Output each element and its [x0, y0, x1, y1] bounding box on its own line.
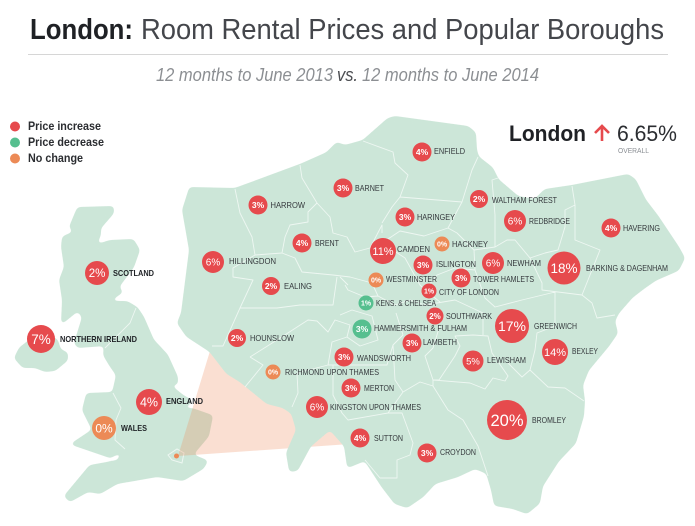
- Barnet: 3%: [337, 183, 350, 193]
- Haringey: [396, 208, 455, 226]
- callout: London overall: OVERALL: [618, 146, 649, 155]
- Ealing: EALING: [284, 282, 312, 291]
- Hackney: 0%: [437, 242, 448, 248]
- Richmond upon Thames: [266, 364, 379, 380]
- Hillingdon: [202, 251, 276, 273]
- Barking and Dagenham: BARKING & DAGENHAM: [586, 264, 668, 273]
- Richmond upon Thames: RICHMOND UPON THAMES: [285, 368, 379, 377]
- Enfield: [412, 142, 465, 162]
- legend: No change: [28, 151, 83, 165]
- Kingston upon Thames: 6%: [310, 402, 324, 414]
- Redbridge: [504, 210, 570, 232]
- callout: London overall: 6.65%: [617, 121, 677, 146]
- London map: [178, 117, 684, 513]
- UK bubbles: [27, 261, 203, 440]
- Ealing: [262, 277, 312, 295]
- Greenwich: 17%: [498, 318, 526, 334]
- Northern Ireland: [27, 325, 137, 353]
- Brent: BRENT: [315, 239, 339, 248]
- Haringey: 3%: [399, 212, 412, 222]
- Bromley: [487, 400, 566, 440]
- UK map: [15, 207, 212, 501]
- Croydon: CROYDON: [440, 448, 476, 457]
- Newham: 6%: [486, 258, 500, 270]
- Redbridge: REDBRIDGE: [529, 217, 570, 226]
- Westminster: 0%: [371, 278, 382, 284]
- Wandsworth: 3%: [338, 352, 351, 362]
- Hillingdon: 6%: [206, 258, 220, 268]
- Camden: CAMDEN: [397, 245, 430, 254]
- Tower Hamlets: 3%: [455, 273, 468, 283]
- Sutton: 4%: [354, 433, 367, 443]
- Kingston upon Thames: [306, 396, 421, 418]
- Kingston upon Thames: KINGSTON UPON THAMES: [330, 403, 421, 412]
- Hillingdon: HILLINGDON: [229, 257, 276, 266]
- Islington: [414, 256, 476, 274]
- Scotland: 2%: [89, 268, 105, 280]
- Northern Ireland: NORTHERN IRELAND: [60, 335, 137, 344]
- Scotland: [85, 261, 154, 285]
- Richmond upon Thames: 0%: [268, 370, 279, 376]
- Kensington and Chelsea: [358, 296, 436, 310]
- Brent: [292, 234, 339, 252]
- Merton: MERTON: [364, 384, 394, 393]
- Lewisham: [462, 350, 526, 372]
- icon: London location marker: [174, 454, 179, 458]
- City of London: 1%: [424, 288, 435, 296]
- Southwark: SOUTHWARK: [446, 312, 492, 321]
- Wandsworth: [334, 348, 411, 366]
- legend: Price increase: [28, 119, 101, 133]
- England: ENGLAND: [166, 397, 203, 406]
- icon: up arrow: [595, 126, 609, 141]
- Camden: 11%: [372, 246, 394, 258]
- Southwark: 2%: [429, 312, 441, 321]
- Sutton: SUTTON: [374, 434, 403, 443]
- Lewisham: LEWISHAM: [487, 356, 526, 365]
- Barnet: BARNET: [355, 184, 384, 193]
- subtitle: vs.: [337, 65, 358, 85]
- Hackney: HACKNEY: [452, 240, 488, 249]
- Merton: [342, 378, 394, 398]
- Barnet: [334, 178, 384, 198]
- Redbridge: 6%: [508, 216, 522, 228]
- Bexley: BEXLEY: [572, 347, 598, 356]
- Havering: [602, 218, 660, 238]
- Havering: HAVERING: [623, 224, 660, 233]
- Barking and Dagenham: 18%: [550, 261, 578, 276]
- Lambeth: [402, 334, 457, 352]
- Islington: 3%: [417, 260, 430, 270]
- Bromley: BROMLEY: [532, 416, 566, 425]
- City of London: [422, 284, 499, 298]
- England: [136, 389, 203, 415]
- Bromley: 20%: [490, 412, 524, 430]
- Newham: NEWHAM: [507, 259, 541, 268]
- Greenwich: [495, 309, 577, 343]
- Croydon: [418, 444, 476, 462]
- Hackney: [434, 236, 488, 252]
- Ealing: 2%: [265, 281, 278, 291]
- Scotland: SCOTLAND: [113, 269, 154, 278]
- Wales: WALES: [121, 424, 147, 433]
- Tower Hamlets: TOWER HAMLETS: [473, 275, 534, 284]
- Bexley: 14%: [544, 347, 566, 359]
- Wales: 0%: [95, 422, 113, 436]
- Waltham Forest: [470, 190, 557, 208]
- Wales: [92, 416, 147, 440]
- title: London:: [30, 14, 133, 46]
- Hounslow: [228, 329, 294, 347]
- Sutton: [350, 428, 403, 448]
- title: Room Rental Prices and Popular Boroughs: [141, 14, 664, 46]
- Wandsworth: WANDSWORTH: [357, 354, 411, 363]
- subtitle: 12 months to June 2013: [156, 65, 333, 85]
- Hammersmith and Fulham: [352, 320, 467, 338]
- Waltham Forest: WALTHAM FOREST: [492, 196, 557, 205]
- Barking and Dagenham: [548, 252, 668, 284]
- Enfield: ENFIELD: [434, 147, 465, 156]
- Enfield: 4%: [416, 147, 429, 157]
- callout: London overall: London: [509, 121, 586, 146]
- Newham: [482, 252, 541, 274]
- Lambeth: LAMBETH: [423, 338, 457, 347]
- Waltham Forest: 2%: [473, 194, 486, 204]
- callout: London overall: [509, 121, 677, 155]
- Harrow: [248, 196, 305, 214]
- Haringey: HARINGEY: [417, 213, 455, 222]
- Hounslow: 2%: [231, 333, 244, 343]
- Camden: [370, 238, 430, 264]
- Kensington and Chelsea: KENS. & CHELSEA: [376, 299, 436, 308]
- borough bubbles: [202, 142, 668, 462]
- Hounslow: HOUNSLOW: [250, 334, 294, 343]
- Westminster: WESTMINSTER: [386, 275, 437, 284]
- Northern Ireland: 7%: [31, 332, 51, 347]
- legend: Price decrease: [28, 135, 104, 149]
- Southwark: [426, 308, 492, 324]
- City of London: CITY OF LONDON: [439, 288, 499, 297]
- Brent: 4%: [296, 238, 309, 248]
- Merton: 3%: [345, 383, 358, 393]
- Hammersmith and Fulham: 3%: [356, 324, 369, 334]
- Croydon: 3%: [421, 448, 434, 458]
- Islington: ISLINGTON: [436, 260, 476, 269]
- Lambeth: 3%: [406, 338, 419, 348]
- Lewisham: 5%: [466, 356, 480, 368]
- Havering: 4%: [605, 223, 618, 233]
- legend: [10, 119, 104, 165]
- zoom wedge from London location to London map: [178, 351, 350, 456]
- Greenwich: GREENWICH: [534, 322, 577, 331]
- Bexley: [542, 339, 598, 365]
- Kensington and Chelsea: 1%: [361, 300, 372, 308]
- subtitle: [156, 65, 539, 85]
- Harrow: HARROW: [270, 201, 305, 210]
- Harrow: 3%: [252, 200, 265, 210]
- Tower Hamlets: [452, 268, 534, 288]
- Hammersmith and Fulham: HAMMERSMITH & FULHAM: [374, 324, 467, 333]
- England: 4%: [140, 396, 158, 410]
- Westminster: [368, 272, 437, 288]
- subtitle: 12 months to June 2014: [362, 65, 539, 85]
